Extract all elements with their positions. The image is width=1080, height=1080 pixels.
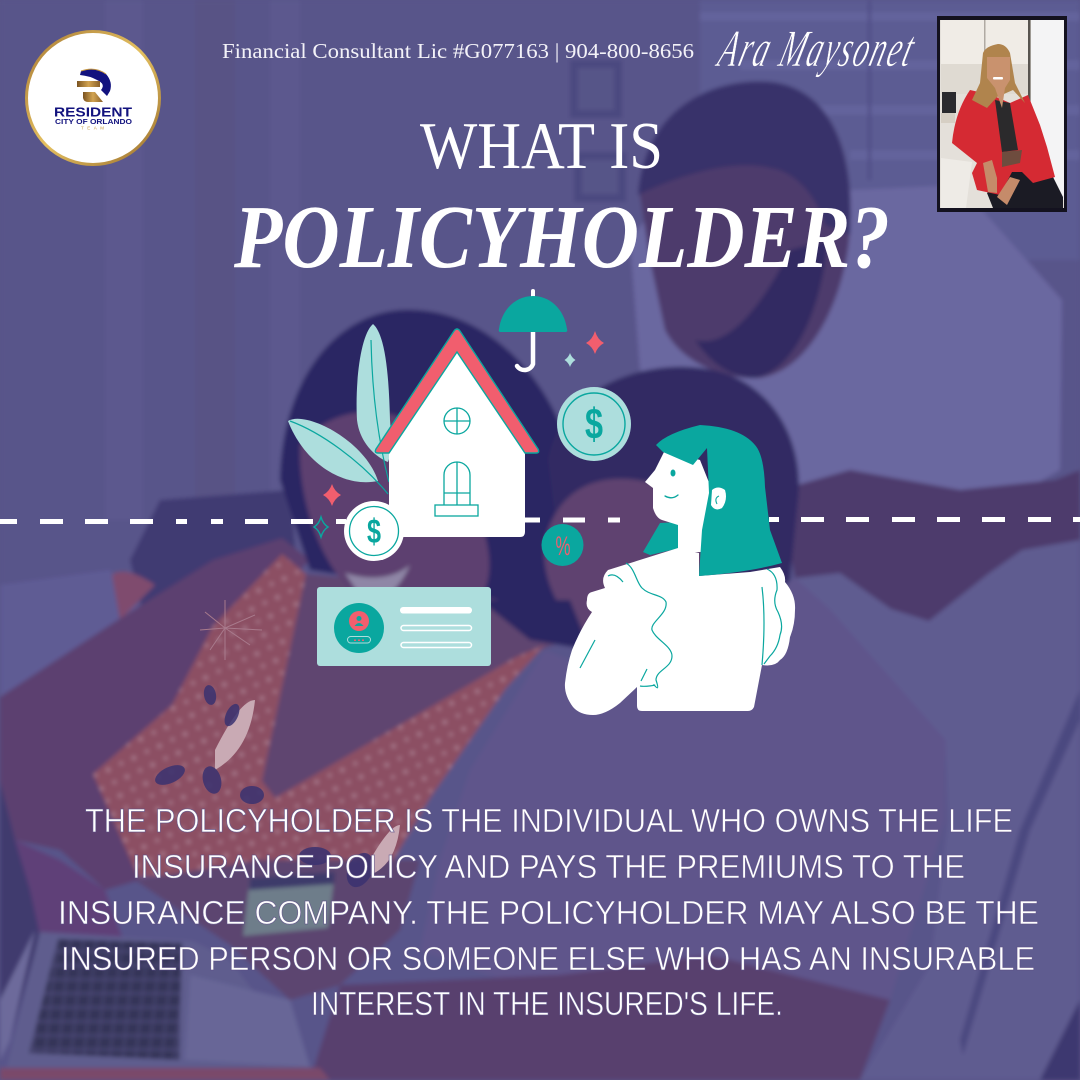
sparkles [314, 331, 604, 537]
coin: aqua dollar [557, 387, 631, 461]
leaf slanted [288, 419, 388, 494]
portrait: hands [983, 160, 997, 193]
woman: smile teeth [345, 565, 410, 603]
character face and neck [645, 450, 712, 552]
man: beard [695, 240, 828, 378]
window blinds at upper right [700, 0, 1080, 260]
woman: hair [280, 310, 660, 640]
man: white shirt [630, 185, 1062, 510]
woman character [565, 425, 795, 715]
body paragraph: THE POLICYHOLDER IS THE INDIVIDUAL WHO OWNS THE LIFE [85, 802, 1013, 839]
portrait: dark trousers [987, 170, 1063, 208]
coin: aqua dollar: $ [585, 400, 603, 449]
percent badge: % [556, 531, 570, 561]
signature: Ara Maysonet [711, 20, 923, 78]
portrait: face and neck [987, 57, 1010, 108]
coin: white dollar: $ [367, 513, 381, 551]
character eye and smile [665, 470, 678, 498]
portrait: top and belt [995, 100, 1018, 152]
man: forearm [780, 470, 1080, 621]
woman: patterned dress [93, 554, 545, 884]
character body and arm [565, 548, 795, 715]
laptop [7, 932, 310, 1067]
portrait: hair [972, 44, 1025, 108]
child: shirt [420, 578, 945, 1000]
percent badge [542, 524, 584, 566]
coral tassel cushion [112, 572, 155, 620]
character hair lower left [643, 522, 680, 555]
umbrella [499, 291, 567, 370]
logo R mark [77, 69, 111, 102]
illustration: insurance scene [288, 291, 795, 715]
woman: face [300, 412, 489, 620]
body paragraph: INTEREST IN THE INSURED'S LIFE. [311, 985, 783, 1022]
logo badge: TEAM [81, 126, 104, 130]
house round window [444, 408, 470, 434]
man: head and beard [640, 82, 851, 378]
leaf upright [357, 324, 392, 482]
strip under laptop [0, 1068, 330, 1080]
policy card [317, 587, 491, 666]
body paragraph: INSURANCE COMPANY. THE POLICYHOLDER MAY ALSO BE THE [58, 894, 1039, 931]
child: hair and face [548, 367, 799, 650]
dark shadow lower left [0, 781, 40, 1050]
body paragraph [58, 802, 1039, 1022]
bottom forearm [310, 955, 890, 1080]
logo text: RESIDENT [54, 104, 132, 120]
ruffle lines [580, 563, 782, 688]
coin: white dollar [344, 501, 404, 561]
lower dress [15, 840, 125, 945]
dress paisley motifs [152, 600, 400, 891]
body paragraph: INSURED PERSON OR SOMEONE ELSE WHO HAS AN INSURABLE [61, 940, 1035, 977]
house arched door window [435, 462, 478, 516]
house [375, 329, 539, 537]
character hair [656, 425, 782, 576]
body paragraph: INSURANCE POLICY AND PAYS THE PREMIUMS TO THE [132, 848, 965, 885]
wall with curtain on the left [105, 0, 300, 520]
shadow beside child's face [480, 600, 590, 650]
header contact line: Financial Consultant Lic #G077163 | 904-800-8656 [222, 39, 694, 63]
character ear [711, 488, 726, 509]
blanket on the right [795, 540, 1080, 1080]
dashed line [0, 517, 1080, 524]
portrait: red jacket [952, 90, 1055, 195]
hand and credit card [135, 860, 420, 1000]
woman: arm [0, 538, 310, 890]
portrait photo [937, 16, 1067, 212]
house roof [375, 329, 539, 453]
title: POLICYHOLDER?: POLICYHOLDER? [233, 188, 890, 287]
woman: chest [262, 574, 580, 798]
wall picture frames [570, 60, 626, 202]
logo badge: CITY OF ORLANDO [55, 117, 132, 126]
title: WHAT IS: WHAT IS [420, 109, 663, 183]
logo badge [26, 32, 160, 164]
sofa back and pillows on the left [130, 490, 300, 640]
